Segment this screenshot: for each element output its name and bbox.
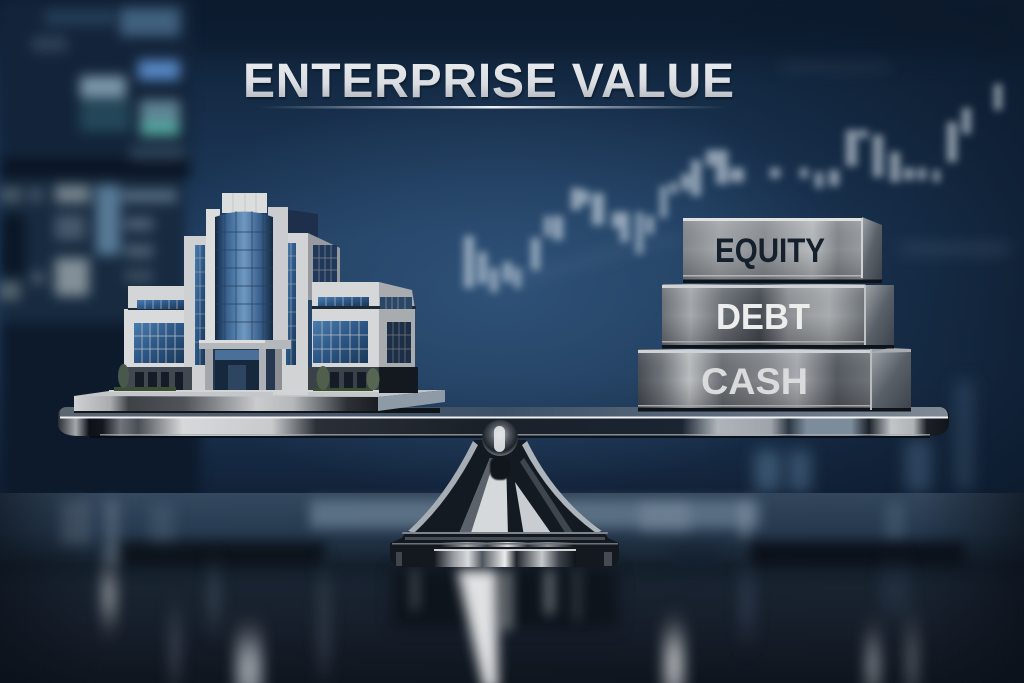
- blurred candlestick chart: [464, 84, 1002, 292]
- block: cash: [638, 348, 911, 412]
- building model: [74, 193, 445, 413]
- reflective floor: [0, 493, 1024, 683]
- block: equity: [683, 217, 882, 283]
- building back block: [268, 207, 318, 240]
- scale beam: [58, 407, 949, 438]
- title: ENTERPRISE VALUE: [243, 55, 734, 108]
- building entrance: [109, 340, 379, 392]
- blurred screens at left: [0, 0, 200, 503]
- block: equity: EQUITY: [715, 232, 825, 270]
- block: cash: CASH: [701, 361, 808, 402]
- stacked metal blocks: [638, 217, 911, 412]
- scale pivot ball: [482, 420, 518, 456]
- building penthouse: [222, 193, 267, 213]
- building left tower: [184, 207, 288, 391]
- block: debt: [662, 284, 894, 348]
- scale base ring: [390, 532, 619, 567]
- building trees and hedges: [114, 364, 380, 391]
- building glass cylinder: [215, 211, 273, 340]
- building left wing: [124, 286, 192, 391]
- building platform: [74, 390, 445, 413]
- scale base reflection: [392, 568, 618, 683]
- building right tower: [273, 233, 340, 395]
- block: debt: DEBT: [716, 296, 810, 337]
- blurred chart trend and side lights: [520, 64, 1010, 492]
- balance scale: [58, 407, 949, 567]
- building right wing: [308, 282, 418, 393]
- title: ENTERPRISE VALUE: [244, 57, 735, 110]
- scale stand cone: [408, 440, 603, 538]
